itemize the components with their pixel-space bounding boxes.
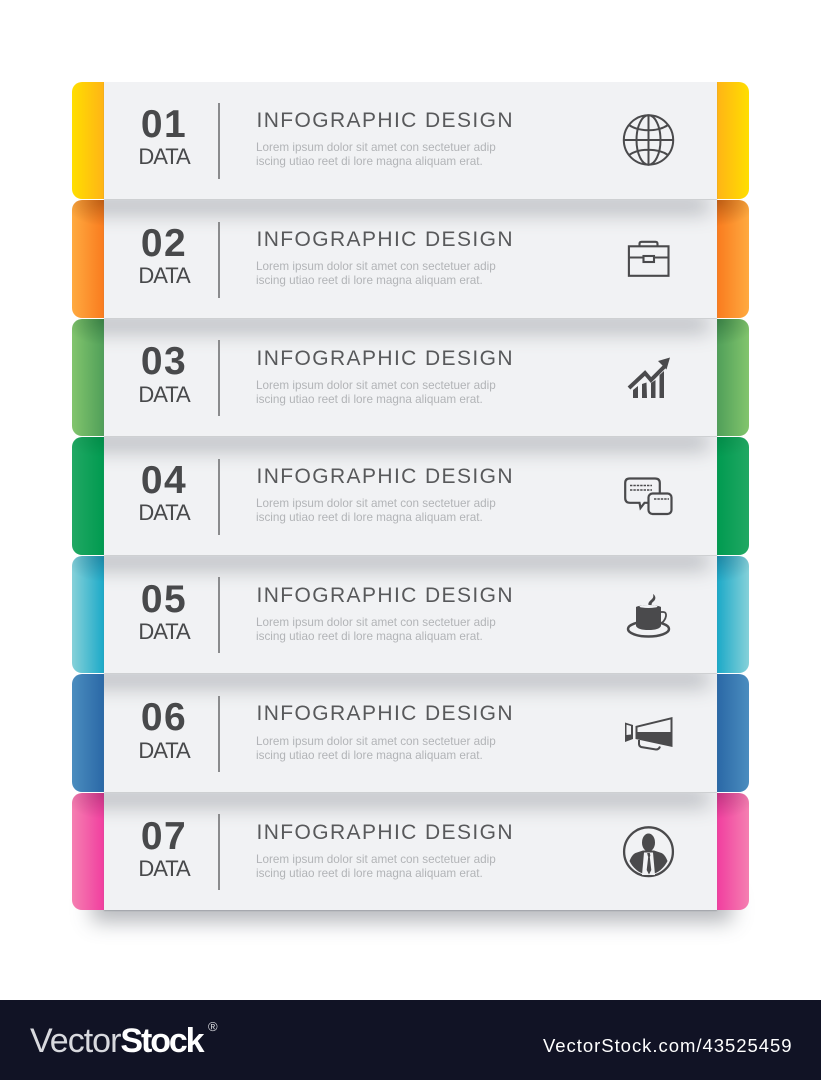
row 02 [72,200,749,319]
left tab orange [72,200,104,318]
label DATA: DATA [138,738,190,762]
number 01: 01 [141,103,187,146]
body text: Lorem ipsum dolor sit amet con sectetuer adip [256,734,496,748]
number 03: 03 [141,340,187,383]
body text: Lorem ipsum dolor sit amet con sectetuer adip [256,141,496,154]
left tab yellow [72,82,104,199]
icon: growth chart [628,358,670,398]
body text: iscing utiao reet di lore magna aliquam erat. [256,748,483,762]
panel 07 [104,793,717,910]
body text: Lorem ipsum dolor sit amet con sectetuer adip [256,379,496,392]
body text [256,616,496,643]
heading: INFOGRAPHIC DESIGN [256,702,514,725]
panel 04 [104,437,717,555]
body text: Lorem ipsum dolor sit amet con sectetuer adip [256,260,496,273]
stock id text: VectorStock.com/43525459 [543,1035,793,1056]
right tab dark green [717,437,749,555]
panel 01 [104,82,717,199]
icon: chat bubbles [624,477,673,516]
number 06: 06 [141,696,187,739]
panel 02 [104,200,717,318]
body text: iscing utiao reet di lore magna aliquam erat. [256,393,483,406]
body text: Lorem ipsum dolor sit amet con sectetuer adip [256,616,496,629]
label DATA: DATA [138,619,190,644]
left tab green [72,319,104,436]
brand logo text: VectorStock [30,1022,202,1060]
row 06 [72,674,749,793]
left tab teal [72,556,104,673]
body text [256,497,496,524]
heading: INFOGRAPHIC DESIGN [256,465,514,488]
body text: iscing utiao reet di lore magna aliquam erat. [256,630,483,643]
panel 06 [104,674,717,792]
body text: iscing utiao reet di lore magna aliquam erat. [256,511,483,524]
body text: iscing utiao reet di lore magna aliquam erat. [256,155,483,168]
left tab pink [72,793,104,910]
body text [256,141,496,168]
icon: businessman [622,826,674,878]
label DATA: DATA [138,144,190,169]
label DATA: DATA [138,382,190,407]
right tab orange [717,200,749,318]
heading: INFOGRAPHIC DESIGN [256,821,514,844]
right tab pink [717,793,749,910]
label DATA: DATA [138,500,190,525]
heading: INFOGRAPHIC DESIGN [256,584,514,607]
panel 05 [104,556,717,673]
left tab blue [72,674,104,792]
label DATA: DATA [138,263,190,288]
body text: iscing utiao reet di lore magna aliquam erat. [256,867,483,880]
right tab green [717,319,749,436]
right tab teal [717,556,749,673]
right tab yellow [717,82,749,199]
watermark bar [0,1000,821,1080]
row 01 [72,82,749,200]
row 07 [72,793,749,912]
body text [256,379,496,406]
number 04: 04 [141,459,187,502]
row 05 [72,556,749,674]
left tab dark green [72,437,104,555]
label DATA: DATA [138,856,190,881]
icon: briefcase [628,240,670,277]
body text [256,853,496,880]
body text [256,260,496,287]
heading: INFOGRAPHIC DESIGN [256,346,514,370]
brand logo text: ® [208,1019,218,1034]
body text: Lorem ipsum dolor sit amet con sectetuer adip [256,497,496,510]
heading: INFOGRAPHIC DESIGN [256,109,514,132]
icon: megaphone [625,717,672,750]
number 02: 02 [141,222,187,265]
bottom drop shadow [92,880,732,910]
right tab blue [717,674,749,792]
body text: Lorem ipsum dolor sit amet con sectetuer adip [256,853,496,866]
body text [256,734,496,762]
panel 03 [104,319,717,436]
heading: INFOGRAPHIC DESIGN [256,228,514,251]
number 07: 07 [141,815,187,858]
icon: globe [622,114,674,166]
body text: iscing utiao reet di lore magna aliquam erat. [256,274,483,287]
icon: coffee cup [626,594,670,638]
row 04 [72,437,749,556]
row 03 [72,319,749,437]
number 05: 05 [141,578,187,620]
